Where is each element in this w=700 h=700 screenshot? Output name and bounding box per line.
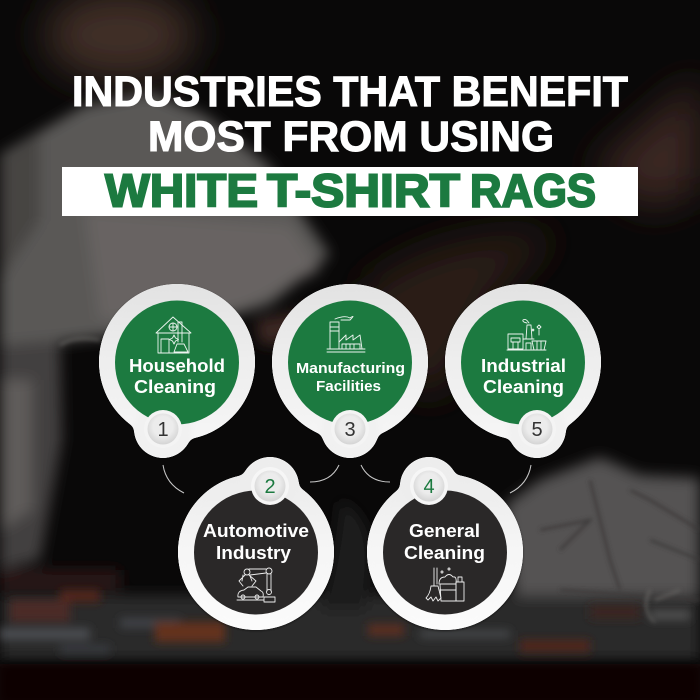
label: household cleaning <box>129 356 225 397</box>
panel: 3 manufacturing facilities <box>272 284 428 458</box>
title: MOST FROM USING <box>148 113 554 161</box>
panel: 4 general cleaning <box>367 457 523 630</box>
label: automotive industry: Industry <box>216 543 291 563</box>
icon: house with broom <box>156 317 191 353</box>
label: general cleaning: General <box>409 521 480 541</box>
panel: 5 industrial cleaning: 5 <box>531 419 543 441</box>
highlighted title banner: T-SHIRT <box>267 164 460 216</box>
title: INDUSTRIES THAT BENEFIT <box>72 68 628 116</box>
panel: 5 industrial cleaning <box>445 284 601 458</box>
panel: 2 automotive industry <box>178 457 334 630</box>
label: household cleaning: Household <box>129 356 225 376</box>
label: industrial cleaning <box>481 356 566 397</box>
highlighted title banner <box>62 164 638 216</box>
icon: factory <box>327 316 365 352</box>
icon: mop and bucket <box>426 568 464 601</box>
panel: 1 household cleaning <box>99 284 255 458</box>
icon: car robot arm <box>237 568 275 602</box>
label: automotive industry <box>203 521 309 563</box>
panel: 4 general cleaning: 4 <box>423 476 435 498</box>
connector arcs <box>163 465 531 493</box>
icon: clean plant <box>507 319 546 350</box>
label: manufacturing facilities <box>296 360 405 395</box>
highlighted title banner: RAGS <box>470 164 596 216</box>
label: industrial cleaning: Industrial <box>481 356 566 376</box>
label: automotive industry: Automotive <box>203 521 309 541</box>
label: manufacturing facilities: Facilities <box>316 378 381 395</box>
label: household cleaning: Cleaning <box>134 377 216 397</box>
panel: 3 manufacturing facilities: 3 <box>344 419 356 441</box>
label: industrial cleaning: Cleaning <box>483 377 564 397</box>
panel: 1 household cleaning: 1 <box>157 419 169 441</box>
label: general cleaning: Cleaning <box>404 543 485 563</box>
panel: 2 automotive industry: 2 <box>264 476 276 498</box>
label: manufacturing facilities: Manufacturing <box>296 360 405 377</box>
label: general cleaning <box>404 521 485 563</box>
title <box>72 68 628 161</box>
highlighted title banner: WHITE <box>105 164 258 216</box>
